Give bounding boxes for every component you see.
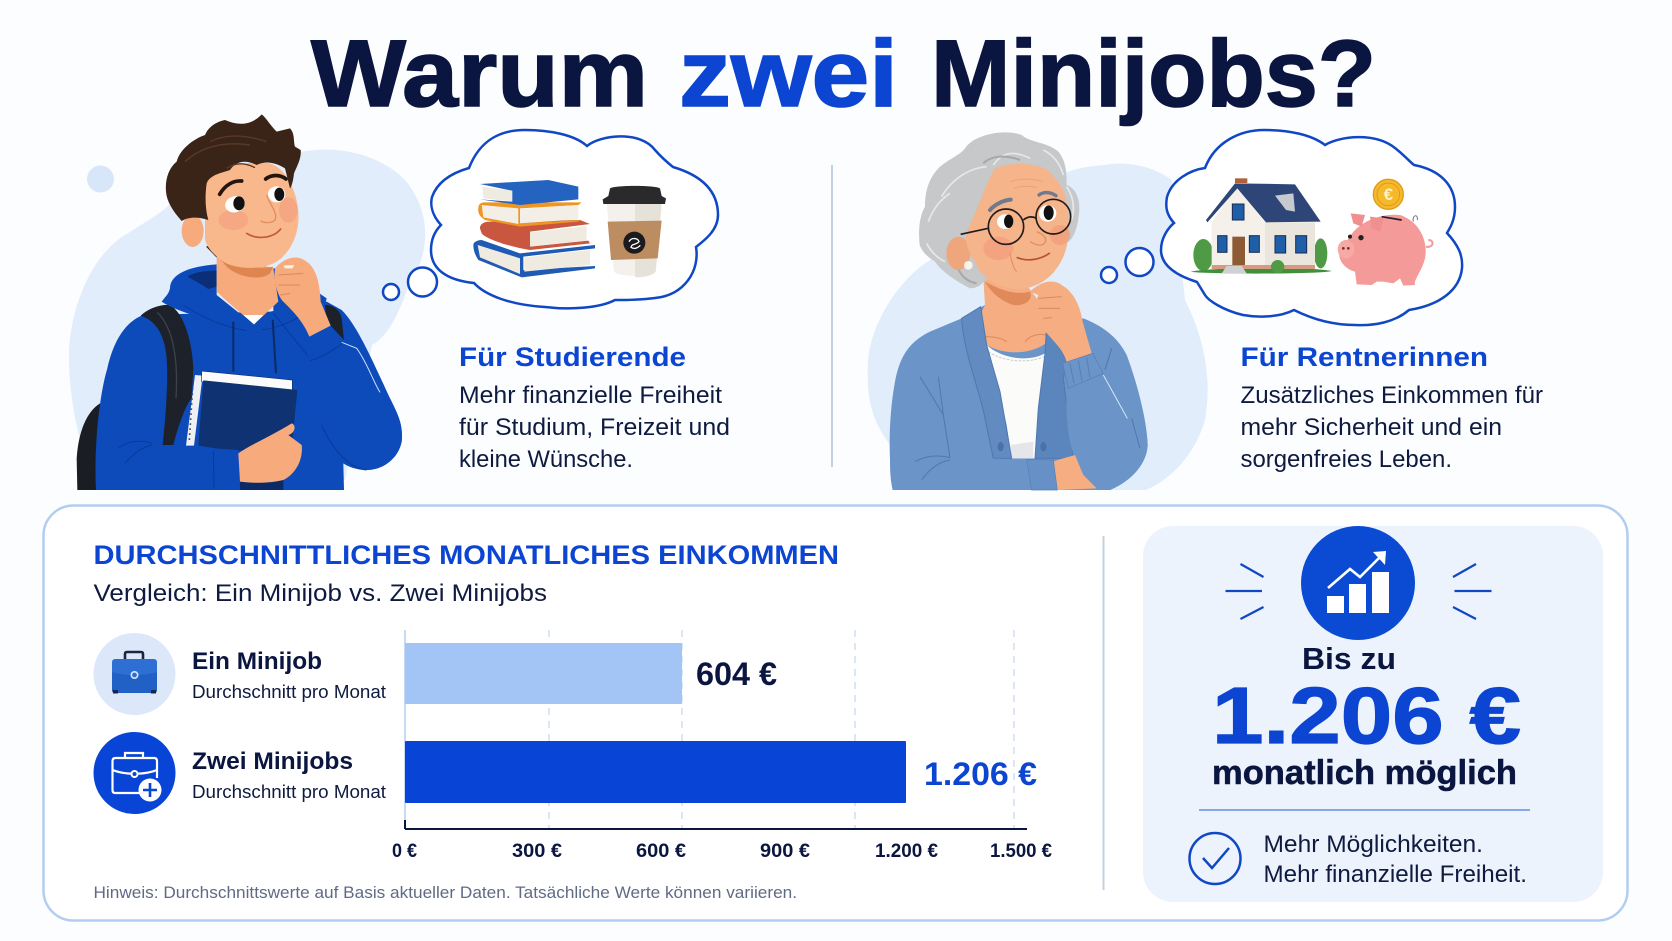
bar: two minijobs (405, 741, 906, 803)
icon: piggy bank with coin: € (1384, 185, 1393, 204)
value: 1206 euro: 1.206 € (924, 756, 1037, 792)
bar: one minijob (405, 643, 682, 704)
label: two minijobs: Durchschnitt pro Monat (192, 782, 386, 802)
bar chart (392, 630, 1052, 862)
illustration: student (77, 114, 402, 490)
callout text: Bis zu (1302, 641, 1396, 676)
callout text: 1.206 € (1212, 671, 1521, 760)
title (311, 21, 1376, 127)
icon: coffee cup (603, 186, 666, 277)
label: one minijob: Durchschnitt pro Monat (192, 682, 386, 702)
label: one minijob: Ein Minijob (192, 648, 322, 675)
label: two minijobs (192, 748, 386, 802)
axis labels: 900 € (760, 841, 810, 862)
title: zwei (679, 21, 898, 127)
chart heading: DURCHSCHNITTLICHES MONATLICHES EINKOMMEN (94, 540, 839, 570)
icon: house (1191, 178, 1332, 274)
text: pensioners heading: Für Rentnerinnen (1240, 342, 1488, 372)
footnote: Hinweis: Durchschnittswerte auf Basis aktueller Daten. Tatsächliche Werte können variieren. (94, 884, 797, 902)
callout: up to 1206 euro (1143, 526, 1603, 902)
axis labels: 1.200 € (875, 841, 938, 862)
text: pensioners body: Zusätzliches Einkommen für (1240, 382, 1543, 409)
icon: check mark (1190, 833, 1240, 884)
thought bubble: books and coffee (383, 130, 718, 308)
illustration: woman (890, 132, 1148, 490)
chart subheading: Vergleich: Ein Minijob vs. Zwei Minijobs (94, 580, 547, 607)
text: students body: für Studium, Freizeit und (459, 414, 730, 441)
label: two minijobs: Zwei Minijobs (192, 748, 353, 775)
panel: students (69, 114, 730, 490)
icon: two briefcases with plus (94, 732, 176, 814)
callout note (1264, 831, 1527, 888)
label: one minijob (192, 648, 386, 702)
text: students body (459, 382, 730, 473)
text: pensioners body: mehr Sicherheit und ein (1240, 414, 1502, 441)
icon: rays (1226, 564, 1492, 619)
icon: piggy bank with coin (1338, 179, 1433, 286)
text: students body: Mehr finanzielle Freiheit (459, 382, 722, 409)
icon: stack of books (473, 180, 595, 277)
thought bubble: house and piggy bank (1101, 130, 1462, 325)
axis labels: 1.500 € (990, 841, 1052, 862)
callout text (1212, 641, 1521, 792)
title: Warum (311, 21, 648, 127)
text: students heading: Für Studierende (459, 342, 686, 372)
axis labels: 0 € (392, 841, 417, 862)
callout note: Mehr finanzielle Freiheit. (1264, 861, 1527, 888)
text: pensioners body (1240, 382, 1543, 473)
icon: growth chart (1301, 526, 1415, 640)
callout text: monatlich möglich (1212, 754, 1517, 792)
axis labels: 600 € (636, 841, 686, 862)
axis labels (392, 841, 1052, 862)
title: Minijobs? (931, 21, 1376, 127)
value: 604 euro: 604 € (696, 656, 777, 692)
callout note: Mehr Möglichkeiten. (1264, 831, 1483, 858)
icon: one briefcase (94, 633, 176, 715)
background blob (69, 150, 425, 490)
panel: income comparison (44, 506, 1628, 920)
text: pensioners body: sorgenfreies Leben. (1240, 446, 1452, 473)
background blob (868, 163, 1208, 490)
text: students body: kleine Wünsche. (459, 446, 633, 473)
panel: pensioners (868, 130, 1543, 490)
axis labels: 300 € (512, 841, 562, 862)
decorative dot (87, 166, 114, 192)
